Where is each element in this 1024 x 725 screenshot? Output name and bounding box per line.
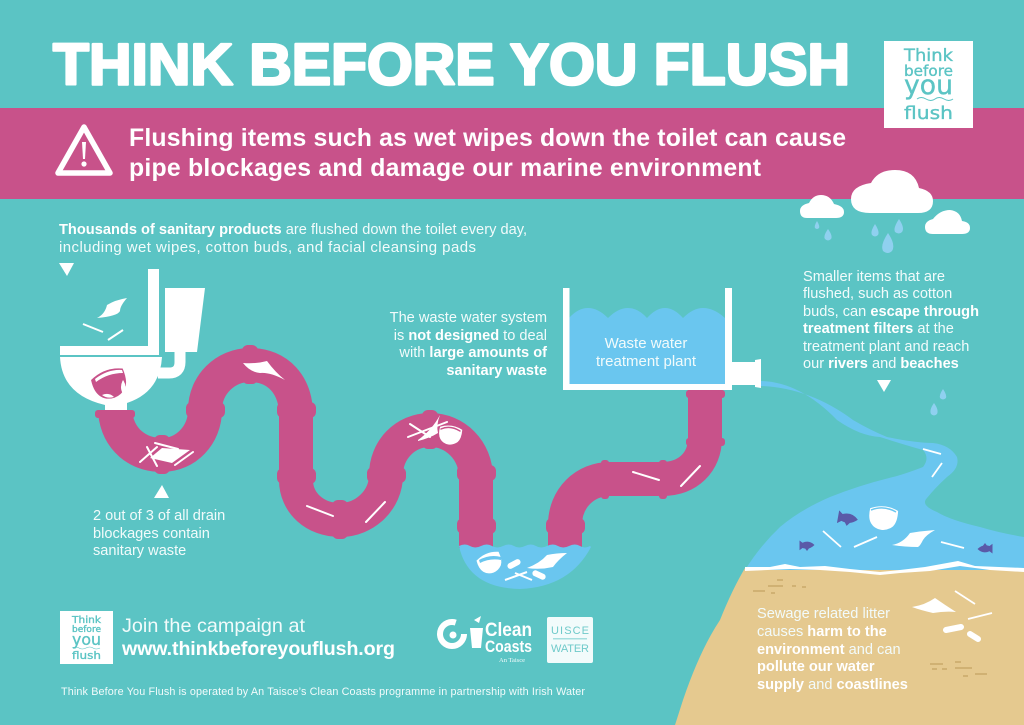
logo: clean coasts: Clean — [485, 620, 532, 641]
small logo: Think — [71, 615, 102, 626]
text: escape through filters: our rivers and beaches — [803, 356, 959, 372]
water trap at pipe bottom — [459, 544, 591, 589]
text: sanitary products: including wet wipes, cotton buds, and facial cleansing pads — [59, 239, 476, 256]
small logo: you — [72, 630, 101, 649]
treatment plant tank: treatment plant — [596, 353, 697, 370]
icon: warning triangle — [58, 127, 110, 173]
logo: think before you flush: flush — [904, 103, 953, 124]
small logo: flush — [72, 649, 101, 662]
icon: rain drops — [815, 219, 946, 416]
arrow: down to river — [877, 380, 891, 392]
footer note: Think Before You Flush is operated by An Taisce’s Clean Coasts programme in partnership with Irish Water — [61, 686, 585, 698]
arrow: up to blockage — [154, 485, 169, 498]
litter inside pipe — [140, 361, 700, 522]
logo: think before you flush: you — [904, 70, 953, 101]
text: drain blockages: sanitary waste — [93, 543, 186, 559]
pink warning banner — [0, 108, 1024, 199]
text: sewage litter: pollute our water — [757, 659, 875, 675]
litter and fish in the sea — [800, 449, 992, 554]
text: not designed — [390, 310, 547, 379]
text: sewage litter: Sewage related litter — [757, 606, 890, 622]
text: sewage litter — [757, 606, 908, 693]
text: escape through filters: flushed, such as cotton — [803, 286, 952, 302]
logo: think before you flush: Think — [903, 46, 953, 65]
litter in water trap — [475, 549, 567, 581]
campaign call to action: Join the campaign at — [122, 615, 306, 637]
icon: rain clouds — [800, 170, 970, 234]
text: not designed: is not designed to deal — [394, 328, 547, 344]
text: sewage litter: causes harm to the — [757, 624, 887, 640]
text: sewage litter: environment and can — [757, 642, 901, 658]
sand marks — [753, 580, 987, 676]
banner text: Flushing items such as wet wipes down the toilet can cause — [129, 125, 846, 152]
text: drain blockages: 2 out of 3 of all drain — [93, 508, 225, 524]
logo: uisce eireann irish water: WATER — [551, 643, 589, 655]
pipe: winding sewer pipe — [95, 345, 725, 548]
text: not designed: with large amounts of — [398, 345, 547, 361]
sand beach — [675, 560, 1024, 725]
outlet pipe — [732, 359, 761, 388]
arrow: down to toilet — [59, 263, 74, 276]
text: drain blockages — [93, 508, 225, 559]
text: drain blockages: blockages contain — [93, 526, 210, 542]
logo: clean coasts — [440, 616, 532, 664]
small logo: before — [72, 625, 101, 635]
text: escape through filters: buds, can escape through — [803, 304, 979, 320]
river and sea — [745, 381, 1024, 570]
banner text: pipe blockages and damage our marine environment — [129, 155, 761, 182]
text: sanitary products: Thousands of sanitary products are flushed down the toilet every day, — [59, 222, 527, 238]
text: sanitary products — [59, 222, 527, 256]
text: not designed: The waste water system — [390, 310, 547, 326]
logo: think before you flush — [884, 41, 973, 128]
shoreline foam — [745, 561, 1024, 575]
logo: uisce eireann irish water — [547, 617, 593, 663]
campaign call to action — [121, 615, 395, 660]
text: sewage litter: supply and coastlines — [757, 677, 908, 693]
logo: clean coasts: An Taisce — [499, 657, 525, 664]
text: escape through filters: Smaller items that are — [803, 269, 945, 285]
text: not designed: sanitary waste — [446, 363, 547, 379]
text: escape through filters: treatment plant and reach — [803, 339, 969, 355]
text: escape through filters — [803, 269, 979, 372]
logo: clean coasts: Coasts — [485, 637, 532, 656]
icon: toilet — [60, 269, 205, 410]
title: THINK BEFORE YOU FLUSH — [53, 32, 850, 98]
litter on the beach — [912, 591, 992, 639]
campaign call to action: www.thinkbeforeyouflush.org — [121, 638, 395, 660]
treatment plant tank — [563, 288, 732, 390]
small logo — [60, 611, 113, 664]
treatment plant tank: Waste water — [605, 335, 687, 352]
logo: think before you flush: before — [904, 62, 953, 80]
banner text — [129, 125, 846, 182]
text: escape through filters: treatment filters at the — [803, 321, 954, 337]
flushed litter above toilet — [83, 298, 127, 340]
logo: uisce eireann irish water: UISCE — [551, 625, 589, 637]
